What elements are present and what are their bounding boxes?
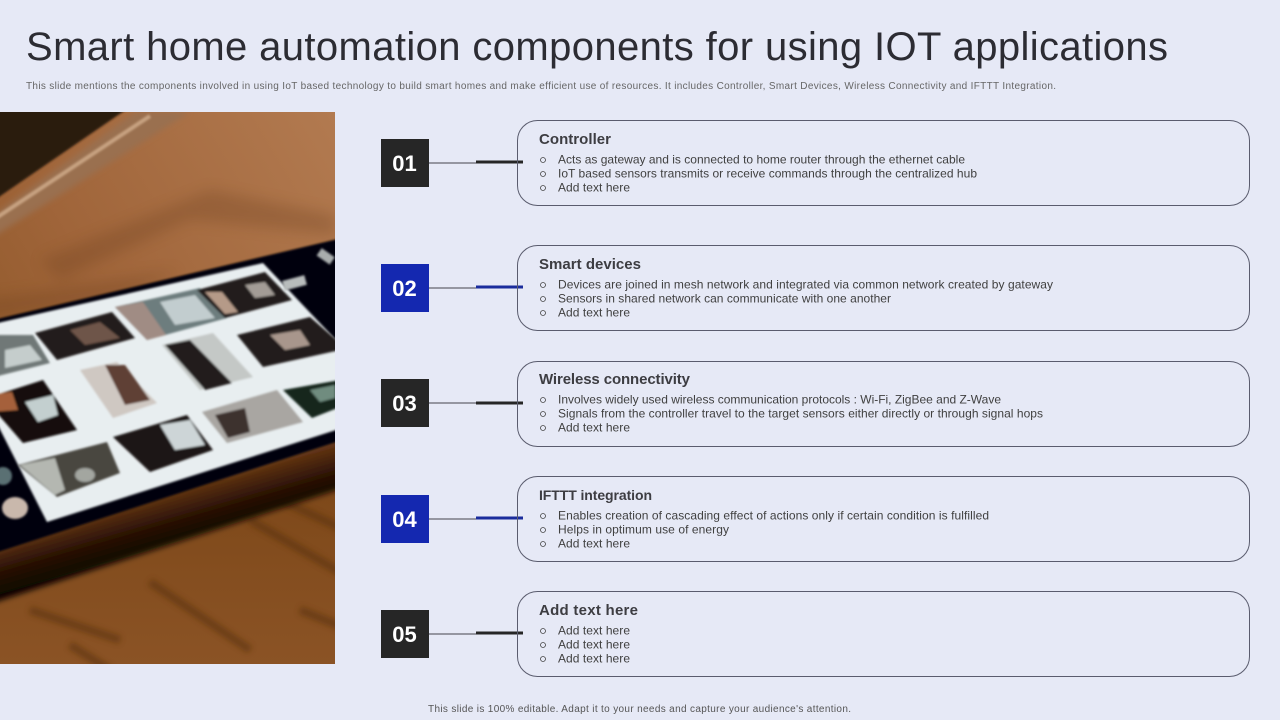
step 03: Wireless connectivity [381,362,1250,446]
number badge 02 [381,264,429,312]
card: Wireless connectivity: Add text here [558,420,630,434]
number badge 01: 01 [392,151,417,176]
card: Wireless connectivity: Signals from the controller travel to the target sensors either directly or through signal hops [558,406,1043,420]
step 04: IFTTT integration [381,476,1250,562]
card: IFTTT integration: Enables creation of cascading effect of actions only if certain condition is fulfilled [558,508,989,522]
connector 02 [429,286,523,288]
card: Controller: Acts as gateway and is connected to home router through the ethernet cable [558,152,965,166]
card: Add text here: Add text here [558,652,630,666]
title: Smart home automation components for using IOT applications [26,25,1168,69]
number badge 03: 03 [392,391,417,416]
card: Smart devices: Smart devices [539,256,641,273]
connector 04 [429,516,523,520]
card: Controller: Controller [539,131,611,148]
connector 01 [429,160,523,164]
number badge 01 [381,139,429,187]
card: Controller: IoT based sensors transmits or receive commands through the centralized hub [558,166,977,180]
step 01: Controller [381,120,1250,206]
card: IFTTT integration: Add text here [558,536,630,550]
step 02: Smart devices [381,246,1250,330]
card: Wireless connectivity [518,362,1250,446]
number badge 04 [381,495,429,543]
number badge 02: 02 [392,276,417,301]
card: IFTTT integration: IFTTT integration [539,487,652,503]
card: Smart devices: Devices are joined in mesh network and integrated via common network created by gateway [558,278,1053,292]
card: IFTTT integration [518,476,1250,562]
card: Wireless connectivity: Wireless connectivity [539,371,691,388]
card: Add text here: Add text here [558,624,630,638]
card: IFTTT integration: Helps in optimum use of energy [558,522,729,536]
number badge 05: 05 [392,622,417,647]
subtitle description: This slide mentions the components involved in using IoT based technology to build smart homes and make efficient use of resources. It includes Controller, Smart Devices, Wireless Connectivity and IFTTT Integration. [26,81,1056,92]
connector 03 [429,402,523,404]
card: Smart devices: Add text here [558,306,630,320]
card: Add text here [518,592,1250,676]
card: Controller [518,120,1250,206]
card: Add text here: Add text here [558,638,630,652]
card: Smart devices [518,246,1250,330]
connector 05 [429,632,523,634]
card: Wireless connectivity: Involves widely used wireless communication protocols : Wi-Fi, ZigBee and Z-Wave [558,392,1001,406]
photo: smartphone on wooden table [0,112,335,664]
number badge 04: 04 [392,507,417,532]
card: Add text here: Add text here [539,602,638,619]
number badge 05 [381,610,429,658]
number badge 03 [381,379,429,427]
card: Controller: Add text here [558,180,630,194]
card: Smart devices: Sensors in shared network can communicate with one another [558,292,891,306]
footer note: This slide is 100% editable. Adapt it to your needs and capture your audience's attention. [428,704,851,715]
step 05: Add text here [381,592,1250,676]
